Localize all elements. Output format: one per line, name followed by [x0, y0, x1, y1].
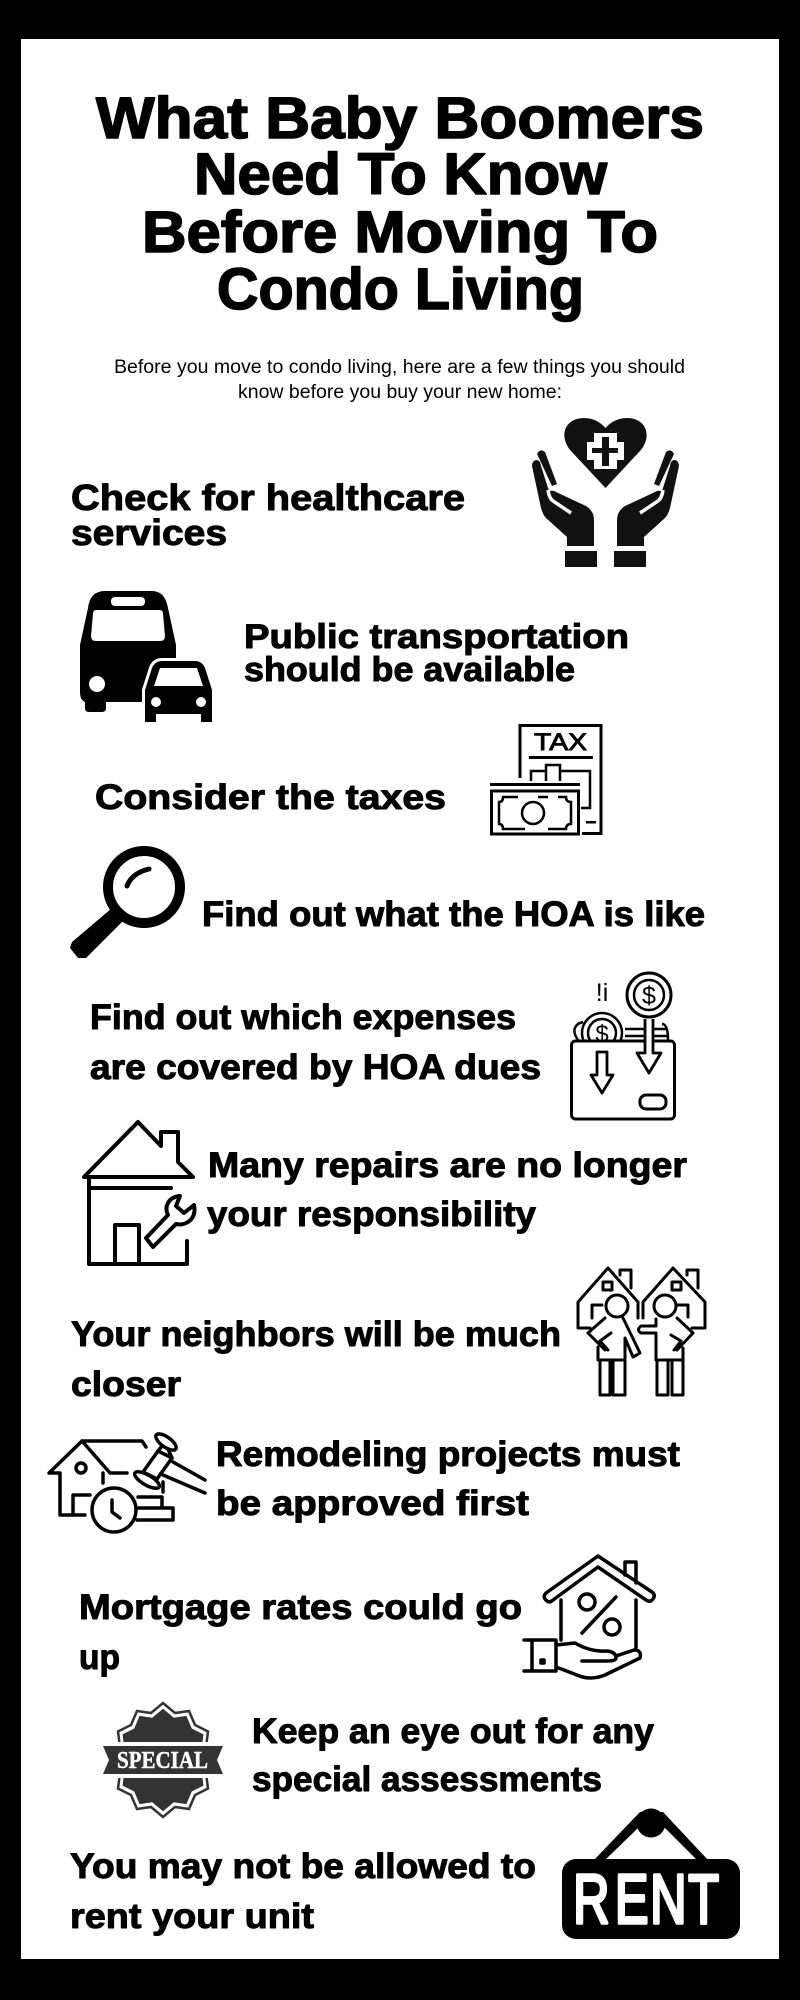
- heading: remodeling: [216, 1435, 680, 1523]
- icon: special badge: [103, 1703, 223, 1817]
- icon: two neighbors and houses: [578, 1268, 705, 1395]
- item: neighbors: [71, 1268, 705, 1404]
- heading: mortgage: Mortgage rates could go: [79, 1588, 522, 1627]
- heading: HOA: Find out what the HOA is like: [202, 895, 705, 934]
- icon: bus and car: [80, 591, 212, 722]
- heading: HOA dues: Find out which expenses: [90, 998, 516, 1037]
- heading: rent: rent your unit: [70, 1897, 314, 1936]
- icon: rent sign: RENT: [573, 1860, 719, 1938]
- heading: healthcare: [71, 477, 465, 553]
- heading: transportation: should be available: [244, 651, 575, 689]
- item: taxes: [95, 726, 601, 834]
- heading: healthcare: services: [71, 512, 227, 553]
- item: remodeling: [49, 1431, 680, 1532]
- title: Need To Know: [194, 142, 608, 207]
- item: repairs: [84, 1122, 687, 1264]
- icon: wallet with coins and arrows: $: [595, 1021, 609, 1048]
- heading: rent: You may not be allowed to: [70, 1847, 536, 1886]
- heading: special assessments: special assessments: [252, 1760, 602, 1799]
- heading: rent: [70, 1847, 536, 1936]
- heading: taxes: Consider the taxes: [95, 778, 446, 817]
- heading: HOA dues: [90, 998, 541, 1087]
- icon: wallet with coins and arrows: [572, 973, 674, 1119]
- icon: tax document and money: [490, 726, 601, 834]
- heading: neighbors: [71, 1315, 561, 1404]
- heading: transportation: Public transportation: [244, 618, 629, 656]
- item: healthcare: [71, 418, 679, 567]
- icon: wallet with coins and arrows: !i: [596, 979, 608, 1007]
- heading: mortgage: [79, 1588, 522, 1677]
- icon: rent sign: [562, 1808, 740, 1939]
- icon: house with wrench: [84, 1122, 194, 1264]
- heading: transportation: [244, 618, 629, 689]
- heading: repairs: Many repairs are no longer: [208, 1146, 687, 1185]
- item: mortgage: [79, 1556, 654, 1678]
- heading: mortgage: up: [79, 1638, 120, 1677]
- heading: repairs: [207, 1146, 687, 1234]
- intro text: [114, 357, 685, 403]
- intro text: know before you buy your new home:: [238, 382, 562, 403]
- title: What Baby Boomers: [96, 86, 704, 151]
- heading: remodeling: Remodeling projects must: [216, 1435, 680, 1474]
- item: HOA dues: [90, 973, 674, 1119]
- intro text: Before you move to condo living, here are a few things you should: [114, 357, 685, 378]
- item: special assessments: [103, 1703, 655, 1817]
- icon: heart held by hands: [532, 418, 679, 567]
- heading: HOA dues: are covered by HOA dues: [90, 1048, 541, 1087]
- heading: neighbors: closer: [71, 1365, 181, 1404]
- icon: house, gavel and clock: [49, 1431, 205, 1532]
- icon: magnifying glass: [70, 851, 180, 958]
- heading: neighbors: Your neighbors will be much: [71, 1315, 561, 1354]
- item: rent: [70, 1808, 740, 1939]
- heading: special assessments: [252, 1712, 655, 1799]
- title: Before Moving To: [142, 200, 658, 265]
- heading: remodeling: be approved first: [216, 1484, 529, 1523]
- icon: tax document and money: TAX: [534, 729, 587, 756]
- heading: special assessments: Keep an eye out for any: [252, 1712, 655, 1751]
- heading: repairs: your responsibility: [207, 1195, 537, 1234]
- title: Condo Living: [217, 257, 584, 322]
- heading: healthcare: Check for healthcare: [71, 477, 465, 518]
- item: transportation: [80, 591, 629, 722]
- item: HOA: [70, 851, 705, 958]
- icon: percent house on hand: [524, 1556, 654, 1678]
- title: [96, 86, 704, 322]
- icon: special badge: SPECIAL: [117, 1748, 208, 1774]
- icon: wallet with coins and arrows: $: [642, 982, 656, 1010]
